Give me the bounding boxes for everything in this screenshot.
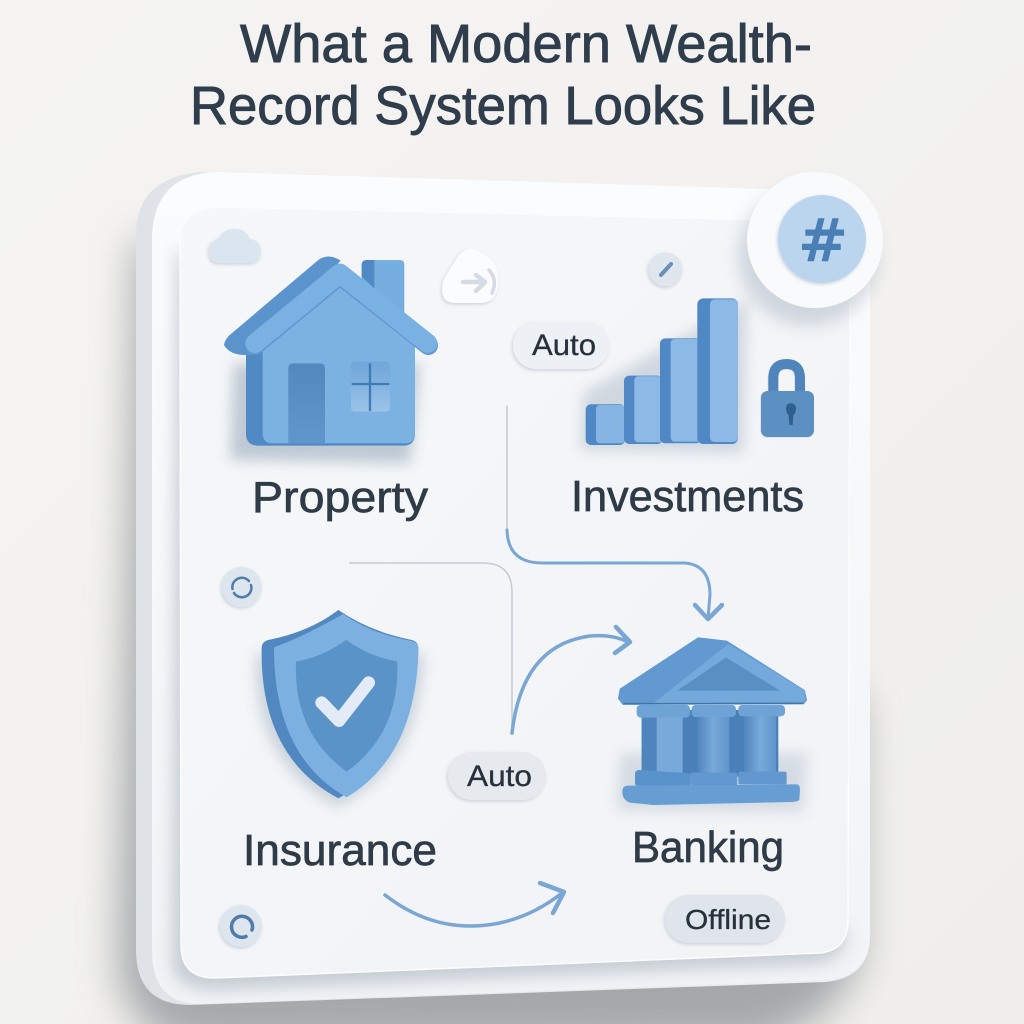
- icon: cloud: [209, 229, 261, 263]
- chimney: [362, 260, 404, 317]
- icon: bank: [617, 638, 807, 812]
- base slab: [622, 784, 800, 805]
- title: Record System Looks Like: [190, 76, 816, 136]
- column middle: [691, 705, 737, 785]
- label: Investments: Investments: [571, 472, 804, 521]
- icon: shield: [256, 610, 423, 807]
- pill: Auto top: Auto: [532, 329, 596, 362]
- arrow: bottom curve: [385, 883, 564, 926]
- roof: [619, 638, 806, 704]
- pill: Auto bottom: Auto: [467, 760, 532, 793]
- panel: outer board: [118, 172, 870, 1024]
- house body: [246, 280, 415, 446]
- title: What a Modern Wealth-: [240, 14, 812, 74]
- pill: Auto top: [513, 322, 609, 369]
- bar 3: [660, 338, 701, 443]
- label: Property: Property: [252, 473, 428, 522]
- connector: top line to banking: [507, 406, 722, 619]
- column right: [738, 705, 787, 784]
- connector: gray elbow line: [349, 563, 512, 735]
- pill: Auto bottom: [448, 752, 546, 800]
- columns backing: [642, 710, 778, 777]
- bar 4: [697, 298, 738, 444]
- icon: ring dot: [220, 905, 262, 947]
- icon: slash dot: [648, 252, 682, 286]
- panel: inner card: [172, 207, 850, 990]
- icon: hash badge: #: [798, 206, 848, 276]
- icon: house: [224, 256, 428, 463]
- door: [288, 363, 325, 443]
- pill: Offline: Offline: [685, 904, 771, 935]
- icon: arrow badge: [442, 249, 498, 303]
- roof: [224, 256, 428, 355]
- bar 1: [586, 404, 625, 445]
- pill: Offline: [665, 895, 785, 943]
- window: [351, 362, 390, 412]
- arrow: curve from Auto: [512, 627, 630, 733]
- icon: refresh dot: [222, 567, 262, 607]
- label: Insurance: Insurance: [243, 826, 437, 875]
- icon: padlock: [761, 364, 814, 437]
- column left: [635, 705, 691, 787]
- title: [190, 14, 816, 136]
- chart: bars: [580, 298, 747, 453]
- label: Banking: Banking: [632, 823, 784, 872]
- icon: hash badge: [738, 172, 883, 326]
- bar 2: [624, 376, 663, 444]
